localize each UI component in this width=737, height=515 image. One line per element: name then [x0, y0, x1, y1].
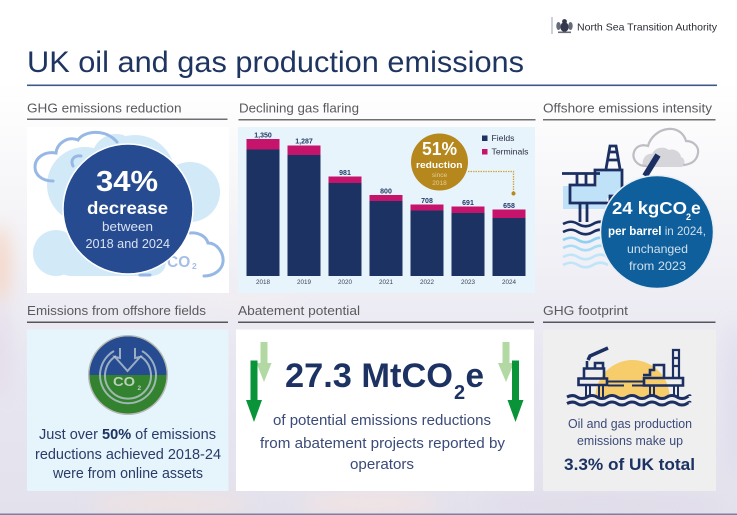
legend: Terminals	[492, 146, 528, 156]
heading: GHG emissions reduction: GHG emissions reduction	[27, 100, 182, 116]
bar chart: 2022	[420, 279, 434, 286]
bar chart: 981	[339, 170, 351, 177]
circle: 24 kgCO2e per barrel: 2	[686, 212, 691, 222]
text: share of UK total: Oil and gas production	[568, 416, 692, 431]
circle: 34% decrease: 34%	[96, 166, 158, 198]
circle: 34% decrease: decrease	[87, 198, 168, 218]
heading: Abatement potential: Abatement potential	[238, 303, 360, 318]
text: abatement description: from abatement projects reported by	[260, 436, 506, 452]
icon: clouds: CO	[167, 254, 190, 271]
callout: 51% reduction since 2018: 51%	[422, 139, 457, 159]
circle: 34% decrease: between	[102, 220, 153, 234]
legend: Fields	[492, 133, 514, 143]
panel: Offshore emissions intensity	[543, 100, 716, 288]
panel: Emissions from offshore fields	[27, 303, 228, 491]
bar chart: 2023	[461, 279, 475, 286]
text: online assets statement: reductions achieved 2018-24	[35, 447, 221, 463]
text: abatement description	[260, 413, 506, 473]
icon: left arrows	[246, 342, 272, 422]
bar chart: 2020	[338, 279, 352, 286]
icon: cloud	[634, 129, 698, 167]
text: share of UK total: 3.3% of UK total	[564, 456, 695, 474]
heading: GHG footprint: GHG footprint	[543, 303, 628, 318]
icon: CO2 circle	[88, 335, 168, 415]
text: online assets statement: were from online assets	[52, 466, 203, 482]
text: abatement description: of potential emissions reductions	[273, 413, 491, 429]
bar chart: 708	[421, 198, 433, 205]
circle: 24 kgCO2e per barrel	[600, 176, 714, 288]
text: share of UK total	[564, 416, 695, 474]
callout: 51% reduction since 2018	[411, 134, 516, 196]
figure: 27.3 MtCO2e: e	[466, 357, 484, 395]
panel: GHG emissions reduction	[27, 100, 229, 293]
panel: Declining gas flaring	[238, 100, 536, 293]
callout: 51% reduction since 2018: 2018	[432, 180, 447, 187]
icon: platform and sun	[567, 348, 690, 405]
bar chart: 2024	[502, 279, 516, 286]
text: online assets statement: Just over 50% of emissions	[39, 427, 216, 443]
logo: North Sea Transition Authority: North Sea Transition Authority	[577, 22, 718, 34]
panel: GHG footprint	[543, 303, 716, 491]
circle: 24 kgCO2e per barrel: from 2023	[629, 259, 686, 273]
icon: CO2 circle: 2	[138, 385, 142, 392]
icon: royal crest	[556, 19, 573, 33]
text: online assets statement	[35, 427, 221, 482]
circle: 24 kgCO2e per barrel: per barrel in 2024,	[608, 224, 706, 238]
heading: Emissions from offshore fields: Emissions from offshore fields	[27, 303, 207, 318]
text: abatement description: operators	[350, 457, 414, 473]
icon: clouds	[33, 132, 223, 276]
circle: 24 kgCO2e per barrel: e	[691, 198, 701, 218]
icon: rig, cloud and waves	[562, 129, 698, 267]
legend	[482, 133, 528, 156]
bar chart: 658	[503, 203, 515, 210]
circle: 34% decrease: 2018 and 2024	[86, 237, 170, 251]
bar chart: 2018	[256, 279, 270, 286]
bar chart: 1,350	[254, 132, 272, 140]
circle: 34% decrease	[63, 144, 193, 274]
circle: 24 kgCO2e per barrel: unchanged	[627, 242, 688, 256]
title: UK oil and gas production emissions	[27, 46, 524, 79]
heading: Declining gas flaring: Declining gas flaring	[239, 100, 359, 116]
bar chart: 1,287	[295, 138, 313, 146]
circle: 24 kgCO2e per barrel: 24 kgCO	[612, 198, 687, 218]
figure: 27.3 MtCO2e: 27.3 MtCO	[285, 357, 453, 395]
icon: right arrows	[498, 342, 524, 422]
figure: 27.3 MtCO2e: 2	[454, 382, 465, 404]
bar chart: 800	[380, 188, 392, 196]
bar chart: 2019	[297, 279, 311, 286]
callout: 51% reduction since 2018: reduction	[416, 160, 463, 171]
bar chart	[246, 132, 526, 286]
bar chart: 2021	[379, 279, 393, 286]
icon: CO2 circle: CO	[113, 374, 135, 389]
text: share of UK total: emissions make up	[577, 433, 683, 448]
panel: Abatement potential	[236, 303, 534, 491]
logo: North Sea Transition Authority	[552, 17, 718, 34]
figure: 27.3 MtCO2e	[285, 357, 484, 404]
heading: Offshore emissions intensity: Offshore emissions intensity	[543, 100, 713, 116]
bar chart: 691	[462, 200, 474, 207]
icon: clouds: 2	[192, 261, 197, 271]
callout: 51% reduction since 2018: since	[432, 172, 447, 179]
